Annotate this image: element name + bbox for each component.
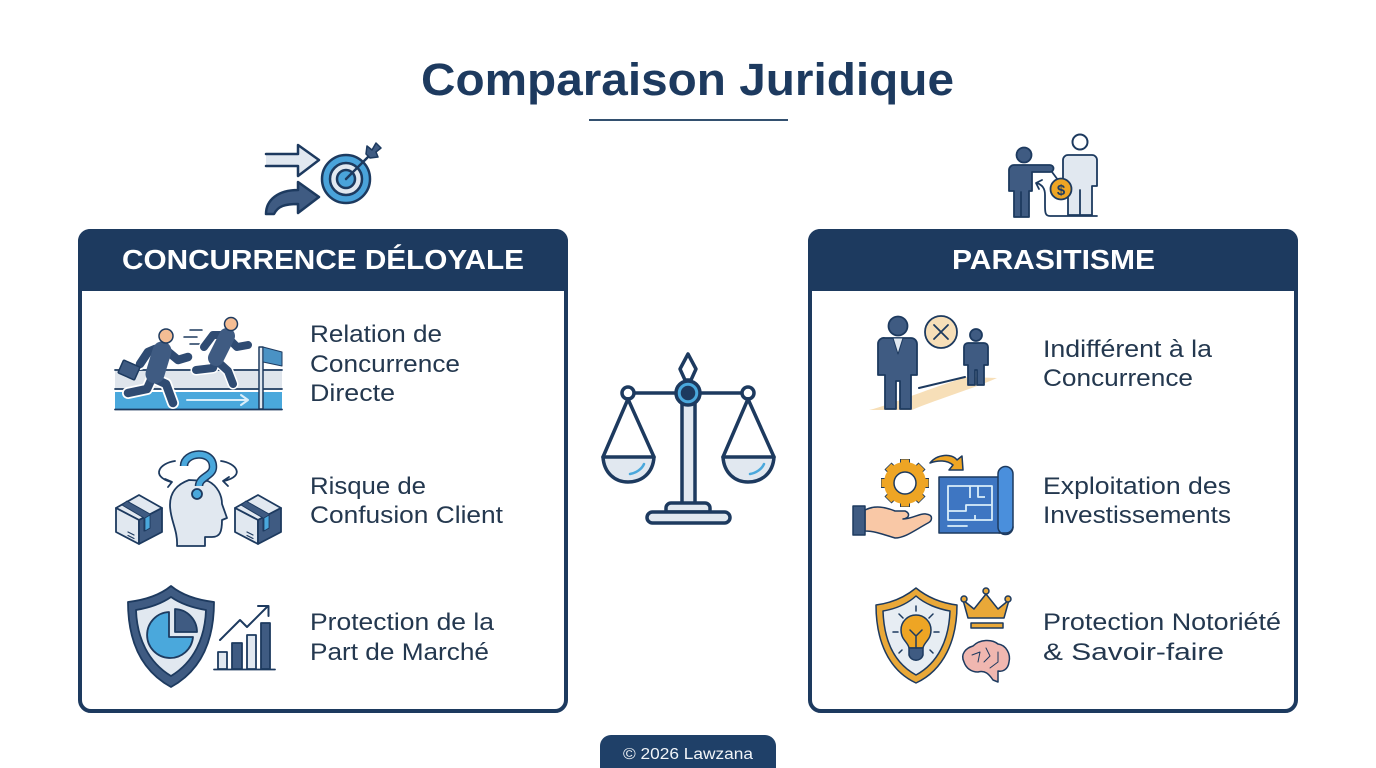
panel header bar — [808, 229, 1298, 291]
icon: confused head between boxes — [116, 454, 281, 546]
icon: parasite taking a coin from a person — [1009, 134, 1097, 217]
icon: arrows and target — [266, 143, 381, 214]
panel: parasitisme — [808, 229, 1298, 711]
icon: hand, gear and blueprint — [853, 455, 1013, 538]
panel frame — [80, 231, 566, 711]
text: protection de la part de marche: Part de Marché — [310, 639, 489, 666]
text: protection notoriete et savoir-faire: & Savoir-faire — [1043, 639, 1224, 666]
panel heading: PARASITISME — [952, 244, 1155, 275]
footer badge: © 2026 Lawzana — [623, 746, 753, 763]
icon: parasite taking a coin from a person: $ — [1057, 182, 1066, 199]
text: indifferent a la concurrence: Indifférent à la — [1043, 336, 1212, 363]
text: exploitation des investissements: Exploitation des — [1043, 473, 1231, 500]
text: risque de confusion client: Confusion Client — [310, 502, 503, 529]
text: indifferent a la concurrence: Concurrence — [1043, 365, 1193, 392]
title: Comparaison Juridique — [421, 54, 954, 105]
text: protection de la part de marche: Protection de la — [310, 609, 494, 636]
panel heading: CONCURRENCE DÉLOYALE — [122, 244, 524, 275]
text: relation de concurrence directe: Directe — [310, 380, 395, 407]
panel frame — [810, 231, 1296, 711]
icon: shield with pie chart and rising bars — [128, 586, 275, 687]
icon: large and small person, no competition — [869, 316, 997, 410]
text: exploitation des investissements: Investissements — [1043, 502, 1231, 529]
text: protection notoriete et savoir-faire: Protection Notoriété — [1043, 609, 1281, 636]
icon: balance scale — [603, 354, 774, 523]
footer badge — [600, 735, 776, 768]
text: risque de confusion client: Risque de — [310, 473, 426, 500]
icon: shield with bulb, crown and brain — [876, 588, 1011, 683]
text: relation de concurrence directe: Relation de — [310, 321, 442, 348]
panel header bar — [78, 229, 568, 291]
icon: runners racing to a flag — [115, 318, 282, 410]
panel: concurrence deloyale — [78, 229, 568, 711]
text: relation de concurrence directe: Concurrence — [310, 351, 460, 378]
